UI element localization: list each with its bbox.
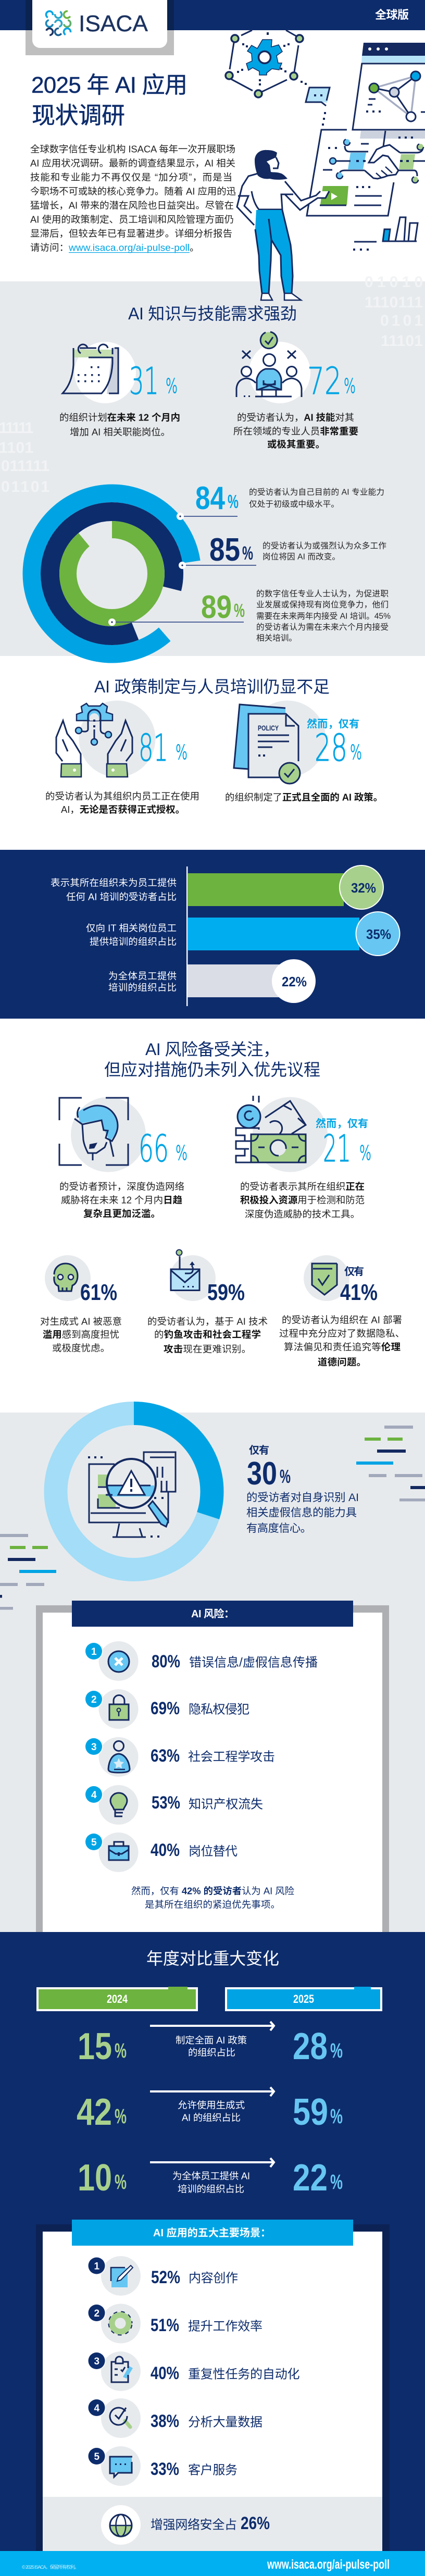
note: 42 percent: 然而，仅有 42% 的受访者认为 AI 风险 — [131, 1885, 294, 1897]
stat: 72 percent — [233, 332, 358, 450]
stat: 72 percent: 或极其重要。 — [267, 439, 325, 450]
bar: 22 percent: 为全体员工提供 — [108, 970, 177, 982]
bar chart: training — [51, 865, 400, 1006]
binary pattern decoration: 01101 — [1, 478, 49, 496]
use case 4: 38% — [151, 2411, 179, 2431]
risk 2: 69% — [151, 1699, 180, 1718]
stat: 66 percent: 66 — [139, 1127, 169, 1170]
icon: hands with gear — [56, 703, 132, 777]
text: 30 percent: 30 — [247, 1456, 277, 1492]
stat: 59 percent: 59% — [207, 1280, 245, 1305]
stat: 66 percent: 威胁将在未来 12 个月内日趋 — [61, 1194, 182, 1206]
binary pattern decoration: 11101 — [381, 332, 423, 350]
use case 3 — [88, 2351, 300, 2391]
heading: AI knowledge demand: AI 知识与技能需求强劲 — [128, 304, 297, 323]
bar: 22 percent: 培训的组织占比 — [108, 982, 177, 993]
stat: 28 percent — [225, 700, 383, 802]
risk 3: 63% — [151, 1746, 180, 1766]
use case 5: 5 — [94, 2451, 100, 2462]
callout: 84 percent: 的受访者认为自己目前的 AI 专业能力 — [249, 488, 384, 497]
stat: 61 percent: 或极度忧虑。 — [52, 1342, 110, 1354]
risk 4: 53% — [152, 1793, 180, 1813]
icon: deepfake face — [59, 1098, 128, 1165]
comparison: generative AI allowed: % — [330, 2105, 343, 2128]
intro paragraph: 技能和专业能力不再仅仅是 “加分项”，而是当 — [30, 172, 232, 182]
comparison: training for all staff: 10 — [78, 2157, 112, 2199]
illustration: bar chart — [353, 217, 418, 251]
stat: 59 percent: 攻击现在更难识别。 — [164, 1343, 251, 1355]
risk 4: 4 — [91, 1790, 97, 1801]
stat: 81 percent — [45, 700, 199, 815]
stat: 41 percent: 的受访者认为组织在 AI 部署 — [282, 1314, 402, 1326]
use case 3: 重复性任务的自动化 — [188, 2368, 300, 2381]
stat: 28 percent: 28 — [315, 726, 347, 770]
comparison: training for all staff: 为全体员工提供 AI — [172, 2171, 250, 2181]
risk 3: 3 — [91, 1742, 97, 1753]
stat: 66 percent: % — [176, 1142, 188, 1165]
comparison: training for all staff: 培训的组织占比 — [178, 2183, 244, 2195]
bar: 32 percent: 任何 AI 培训的受访者占比 — [66, 891, 177, 902]
callout: 89 percent: 业发展或保持现有岗位竞争力，他们 — [256, 600, 389, 610]
intro paragraph: AI 使用的政策制定、员工培训和风险管理方面仍 — [30, 214, 234, 225]
stat: 31 percent: 31 — [129, 360, 159, 403]
icon: shield — [312, 1264, 337, 1295]
stat: 72 percent: 72 — [307, 360, 342, 403]
use case 5: 客户服务 — [188, 2463, 238, 2477]
callout: 84 percent: 仅处于初级或中级水平。 — [249, 499, 339, 509]
stat: 41 percent: 41% — [340, 1280, 378, 1305]
stat: 59 percent: 的钓鱼攻击和社会工程学 — [154, 1329, 261, 1340]
use case 1 — [88, 2256, 238, 2296]
stat: 28 percent: % — [350, 741, 362, 764]
illustration: tablet panel with handshake — [307, 130, 425, 216]
risk 5: 40% — [151, 1840, 180, 1860]
stat: 21 percent: 积极投入资源用于检测和防范 — [240, 1194, 365, 1206]
comparison: generative AI allowed: 允许使用生成式 — [178, 2100, 245, 2110]
callout: 85 percent: 岗位将因 AI 而改变。 — [262, 552, 340, 562]
text: 30 percent: 有高度信心。 — [246, 1522, 311, 1534]
bar: 35 percent: 35% — [366, 926, 391, 942]
bar: 35 percent: 仅向 IT 相关岗位员工 — [86, 922, 177, 934]
callout: 85 percent: % — [242, 542, 253, 564]
stat: 21 percent: % — [359, 1142, 371, 1165]
logo: ISACA — [45, 10, 148, 36]
binary pattern decoration: 0101 — [380, 312, 423, 329]
stat: 21 percent: 的受访者表示其所在组织正在 — [240, 1181, 365, 1192]
header bar: 全球版 — [375, 8, 409, 21]
stat: 66 percent — [59, 1097, 188, 1219]
comparison: generative AI allowed — [77, 2087, 343, 2133]
title: 2025 年 AI 应用 — [31, 72, 188, 98]
callout: 89 percent — [108, 589, 391, 643]
intro paragraph: 今职场不可或缺的核心竞争力。随着 AI 应用的迅 — [30, 185, 236, 197]
stat: 41 percent: 算法偏见和责任追究等伦理 — [284, 1341, 401, 1353]
intro paragraph: 。 — [190, 242, 199, 253]
stat: 41 percent: 道德问题。 — [318, 1357, 366, 1367]
risk 4: 知识产权流失 — [189, 1798, 263, 1811]
stat: 66 percent: 复杂且更加泛滥。 — [83, 1208, 160, 1219]
intro paragraph: 猛增长，AI 带来的潜在风险也日益突出。尽管在 — [30, 200, 234, 210]
callout: 89 percent: 相关培训。 — [256, 634, 297, 643]
strip: cybersecurity 26 percent: 26% — [241, 2513, 270, 2533]
heading: AI risk — [104, 1040, 320, 1079]
binary pattern decoration: 01010 — [365, 274, 423, 291]
icon: money and coins — [236, 1096, 306, 1162]
intro paragraph: 请访问： — [30, 242, 69, 253]
chart: 30 percent donut — [56, 1413, 212, 1569]
stat: 21 percent: 21 — [323, 1127, 351, 1170]
callout: 85 percent: 85 — [209, 532, 240, 568]
icon: policy document: POLICY — [258, 724, 279, 732]
illustration: network hexagon with gear — [226, 30, 307, 97]
risk 1: 错误信息/虚假信息传播 — [189, 1656, 318, 1669]
bar: 32 percent — [51, 865, 383, 909]
stat: 61 percent: 61% — [80, 1280, 117, 1305]
icon: policy document — [234, 704, 300, 784]
icon: monitor with warning magnifier — [88, 1452, 176, 1538]
bar: 32 percent: 32% — [351, 880, 376, 896]
bar: 32 percent: 表示其所在组织未为员工提供 — [51, 877, 177, 888]
icon: globe — [109, 2515, 132, 2537]
chart: concentric progress rings — [0, 460, 226, 687]
stat: 61 percent — [40, 1255, 122, 1354]
strip: cybersecurity 26 percent — [43, 2497, 382, 2551]
callout: 89 percent: % — [234, 600, 245, 621]
callout: 89 percent: 的受访者认为需在未来六个月内接受 — [256, 622, 389, 631]
callout: 84 percent — [177, 480, 384, 520]
stat: 81 percent: AI，无论是否获得正式授权。 — [61, 804, 185, 815]
risk 1: 80% — [152, 1652, 180, 1671]
illustration: speech bubble — [306, 88, 330, 126]
risk 1: 1 — [91, 1646, 97, 1657]
decorative dashes left — [0, 1534, 56, 1610]
use case 2: 51% — [151, 2315, 179, 2335]
panel: AI risks — [36, 1601, 389, 1932]
binary pattern decoration — [0, 274, 423, 496]
stat: 21 percent — [236, 1096, 371, 1219]
comparison: formal AI policy — [78, 2022, 343, 2067]
callout: 84 percent: 84 — [195, 480, 225, 516]
intro paragraph: AI 应用状况调研。最新的调查结果显示，AI 相关 — [30, 157, 235, 169]
year label: 2025 — [226, 1987, 381, 2010]
icon: skull — [54, 1264, 78, 1291]
title: 现状调研 — [32, 102, 125, 129]
stat: 72 percent: % — [344, 375, 356, 398]
stat: 31 percent: % — [166, 375, 178, 398]
use case 2 — [88, 2304, 262, 2344]
stat: 81 percent: 81 — [139, 726, 168, 770]
decorative dashes right — [356, 1426, 425, 1502]
comparison: formal AI policy: 的组织占比 — [188, 2047, 235, 2058]
comparison: formal AI policy: 15 — [78, 2026, 112, 2067]
note: 42 percent: 是其所在组织的紧迫优先事项。 — [145, 1899, 280, 1910]
footer — [0, 2551, 425, 2576]
risk 1 — [84, 1641, 318, 1681]
stat: 59 percent: 的受访者认为，基于 AI 技术 — [147, 1316, 268, 1327]
comparison: generative AI allowed: 59 — [293, 2091, 328, 2133]
text: 30 percent: 仅有 — [249, 1444, 269, 1456]
heading: AI risk: 但应对措施仍未列入优先议程 — [104, 1060, 320, 1079]
stat: 41 percent: 过程中充分应对了数据隐私、 — [279, 1328, 405, 1339]
callout: 89 percent: 需要在未来两年内接受 AI 培训。45% — [256, 612, 391, 621]
logo: ISACA: ISACA — [79, 11, 148, 36]
icon: calendar — [63, 344, 119, 394]
panel header: AI 风险： — [191, 1607, 234, 1620]
use case 2: 2 — [94, 2308, 99, 2319]
intro paragraph — [30, 144, 236, 253]
illustration: browser window — [353, 43, 425, 130]
comparison: training for all staff: % — [330, 2171, 343, 2194]
use case 4: 分析大量数据 — [188, 2416, 262, 2429]
stat: 81 percent: % — [176, 741, 188, 764]
panel header — [72, 2220, 353, 2246]
text: 30 percent: 相关虚假信息的能力具 — [246, 1506, 357, 1519]
callout: 84 percent: % — [228, 491, 239, 512]
stat: 41 percent: 仅有 — [344, 1266, 364, 1278]
intro paragraph: 显滞后，但较去年已有显著进步。详细分析报告 — [30, 228, 232, 239]
heading: policy and training: AI 政策制定与人员培训仍显不足 — [94, 677, 330, 696]
note: 42 percent — [131, 1885, 294, 1910]
title — [31, 72, 188, 129]
year label: 2024 — [38, 1987, 197, 2010]
intro paragraph: 全球数字信任专业机构 ISACA 每年一次开展职场 — [30, 144, 235, 154]
use case 1: 内容创作 — [189, 2271, 238, 2285]
footer: © 2025 ISACA。保留所有权利。 — [22, 2564, 79, 2570]
comparison: training for all staff — [78, 2157, 343, 2199]
stat: 72 percent: 的受访者认为，AI 技能对其 — [237, 412, 354, 423]
heading: year over year: 年度对比重大变化 — [146, 1949, 279, 1968]
risk 2: 隐私权侵犯 — [189, 1703, 249, 1716]
text: 30 percent: 的受访者对自身识别 AI — [246, 1491, 359, 1504]
use case 2: 提升工作效率 — [188, 2320, 262, 2333]
stat: 66 percent: 的受访者预计，深度伪造网络 — [59, 1181, 184, 1192]
year label: 2024: 2024 — [107, 1992, 128, 2005]
strip: cybersecurity 26 percent: 增强网络安全占 — [151, 2518, 237, 2532]
year label: 2025: 2025 — [293, 1992, 314, 2005]
use case 3: 3 — [94, 2356, 99, 2367]
header bar — [0, 0, 425, 55]
stat: 72 percent: 所在领域的专业人员非常重要 — [233, 426, 358, 437]
comparison: generative AI allowed: % — [115, 2105, 127, 2128]
comparison: generative AI allowed: 42 — [77, 2091, 112, 2133]
callout: 85 percent: 的受访者认为或强烈认为众多工作 — [262, 541, 386, 550]
bar: 35 percent — [86, 912, 400, 956]
stat: 61 percent: 滥用感到高度担忧 — [43, 1329, 119, 1340]
risk 5: 5 — [91, 1837, 97, 1848]
risk 2 — [84, 1689, 249, 1729]
binary pattern decoration: 011111 — [1, 457, 49, 475]
use case 4: 4 — [94, 2403, 100, 2414]
icon: team with check — [236, 332, 302, 397]
comparison: generative AI allowed: AI 的组织占比 — [182, 2112, 241, 2123]
stat: 31 percent: 增加 AI 相关职能岗位。 — [70, 426, 170, 438]
stat: 81 percent: 的受访者认为其组织内员工正在使用 — [45, 791, 199, 801]
stat: 31 percent: 的组织计划在未来 12 个月内 — [59, 412, 180, 423]
risk 3 — [84, 1737, 275, 1777]
callout: 89 percent: 89 — [201, 589, 232, 625]
comparison: training for all staff: % — [115, 2171, 127, 2194]
callout: 89 percent: 的数字信任专业人士认为，为促进职 — [256, 589, 389, 598]
stat: 41 percent — [279, 1255, 405, 1367]
callout: 85 percent — [179, 532, 386, 569]
panel header: AI 应用的五大主要场景： — [153, 2226, 271, 2239]
bar: 22 percent: 22% — [282, 974, 307, 989]
stat: 28 percent: 然而，仅有 — [307, 717, 359, 730]
heading: AI risk: AI 风险备受关注， — [145, 1040, 280, 1059]
comparison: formal AI policy: % — [115, 2039, 127, 2062]
use case 5 — [88, 2446, 238, 2486]
stat: 28 percent: 的组织制定了正式且全面的 AI 政策。 — [225, 792, 383, 802]
risk 5: 岗位替代 — [189, 1844, 238, 1859]
use case 5: 33% — [151, 2459, 179, 2479]
risk 5 — [84, 1832, 238, 1872]
risk 2: 2 — [91, 1694, 97, 1705]
stat: 61 percent: 对生成式 AI 被恶意 — [40, 1316, 122, 1327]
icon: phishing email — [171, 1249, 199, 1290]
intro paragraph: www.isaca.org/ai-pulse-poll — [68, 242, 190, 253]
risk 4 — [84, 1785, 263, 1825]
comparison: training for all staff: 22 — [293, 2157, 328, 2199]
risk 3: 社会工程学攻击 — [188, 1750, 275, 1764]
use case 4 — [88, 2398, 262, 2438]
panel: top AI use cases — [36, 2220, 390, 2551]
use case 1: 1 — [94, 2261, 100, 2272]
use case 1: 52% — [151, 2268, 180, 2287]
stat: 21 percent: 深度伪造威胁的技术工具。 — [245, 1209, 360, 1219]
comparison: formal AI policy: 28 — [293, 2026, 328, 2067]
binary pattern decoration: 1110111 — [365, 294, 423, 311]
bar: 22 percent — [108, 959, 316, 1003]
panel header — [72, 1601, 353, 1627]
text: 30 percent — [246, 1444, 359, 1534]
stat: 31 percent — [59, 342, 180, 438]
stat: 21 percent: 然而，仅有 — [316, 1117, 368, 1130]
use case 3: 40% — [151, 2363, 179, 2383]
comparison: formal AI policy: 制定全面 AI 政策 — [176, 2035, 247, 2046]
bar: 35 percent: 提供培训的组织占比 — [90, 936, 177, 947]
stat: 59 percent — [147, 1249, 268, 1355]
text: 30 percent: % — [280, 1466, 291, 1487]
illustration: woman pointing — [237, 150, 329, 300]
comparison: formal AI policy: % — [330, 2039, 343, 2062]
